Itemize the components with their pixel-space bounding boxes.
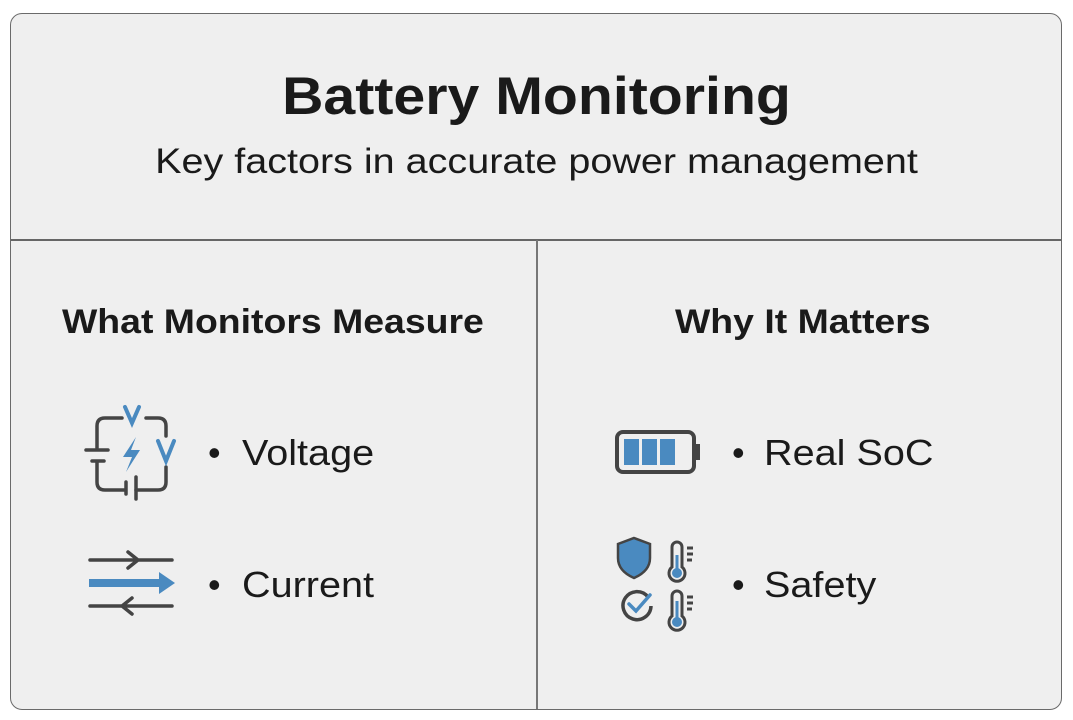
item: Current: Current <box>242 564 374 605</box>
icon: safety <box>616 536 693 632</box>
item: Safety: • <box>732 564 745 605</box>
subtitle: Key factors in accurate power management <box>155 142 918 181</box>
icon: voltage circuit <box>84 404 176 501</box>
icon: battery <box>615 430 700 474</box>
heading: Why It Matters: Why It Matters <box>675 303 931 341</box>
header divider <box>11 239 1061 240</box>
item: Voltage: • <box>208 432 221 473</box>
item: Real SoC: • <box>732 432 745 473</box>
icon: current arrows <box>88 550 175 616</box>
item: Current: • <box>208 564 221 605</box>
column divider <box>536 240 538 710</box>
item: Voltage: Voltage <box>242 432 374 473</box>
item: Real SoC: Real SoC <box>764 432 933 473</box>
heading: What Monitors Measure: What Monitors Measure <box>62 303 484 341</box>
item: Safety: Safety <box>764 564 876 605</box>
title: Battery Monitoring <box>282 67 791 126</box>
